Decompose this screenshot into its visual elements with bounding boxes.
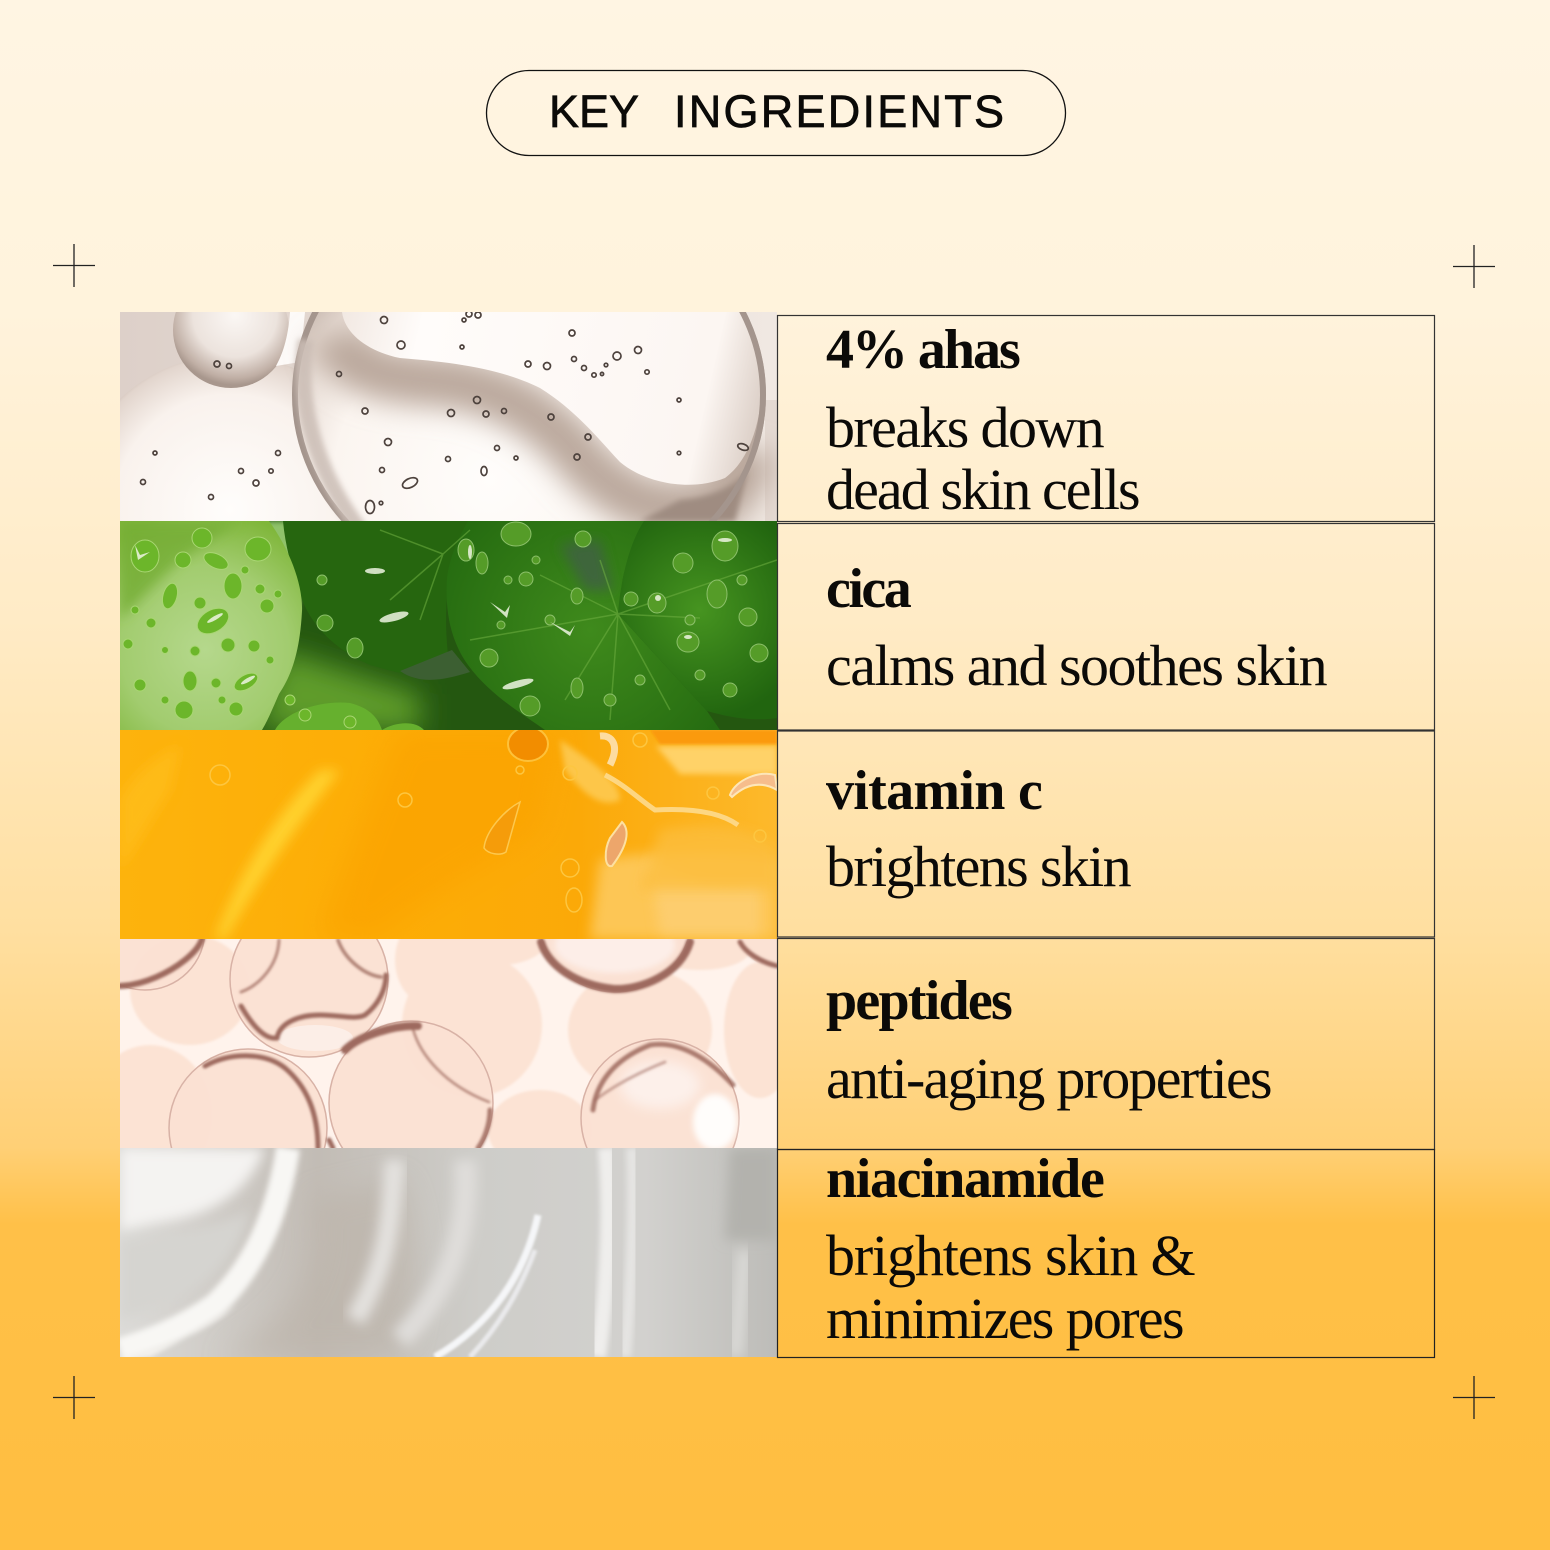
photo: cica leaves bbox=[120, 521, 777, 730]
title pill: INGREDIENTS bbox=[674, 86, 1004, 137]
title pill: KEY bbox=[549, 86, 639, 137]
panel: niacinamide: niacinamide bbox=[826, 1148, 1104, 1210]
panel: 4% ahas bbox=[778, 316, 1434, 522]
panel: vitamin c: brightens skin bbox=[826, 834, 1132, 899]
photo: niacinamide cream bbox=[120, 1148, 777, 1357]
panel: 4% ahas: 4% ahas bbox=[826, 319, 1020, 381]
photo: peptides capsules bbox=[120, 939, 777, 1148]
panel: vitamin c bbox=[778, 731, 1434, 937]
panel: 4% ahas: breaks down bbox=[826, 395, 1105, 460]
panel: peptides: peptides bbox=[826, 970, 1012, 1032]
panel: cica: cica bbox=[826, 558, 912, 620]
panel: niacinamide: minimizes pores bbox=[826, 1286, 1183, 1351]
panel: cica bbox=[778, 524, 1434, 730]
panel: cica: calms and soothes skin bbox=[826, 633, 1328, 698]
panel: niacinamide bbox=[778, 1148, 1434, 1358]
title pill bbox=[486, 70, 1066, 156]
photo: vitamin c orange bbox=[120, 727, 777, 939]
panel: 4% ahas: dead skin cells bbox=[826, 457, 1139, 522]
panel: peptides: anti-aging properties bbox=[826, 1046, 1271, 1111]
photo: ahas gel bbox=[120, 312, 777, 521]
panel: niacinamide: brightens skin & bbox=[826, 1223, 1195, 1288]
panel: peptides bbox=[778, 938, 1434, 1150]
crosshair marks bbox=[53, 244, 1495, 1419]
panel: vitamin c: vitamin c bbox=[826, 760, 1042, 822]
